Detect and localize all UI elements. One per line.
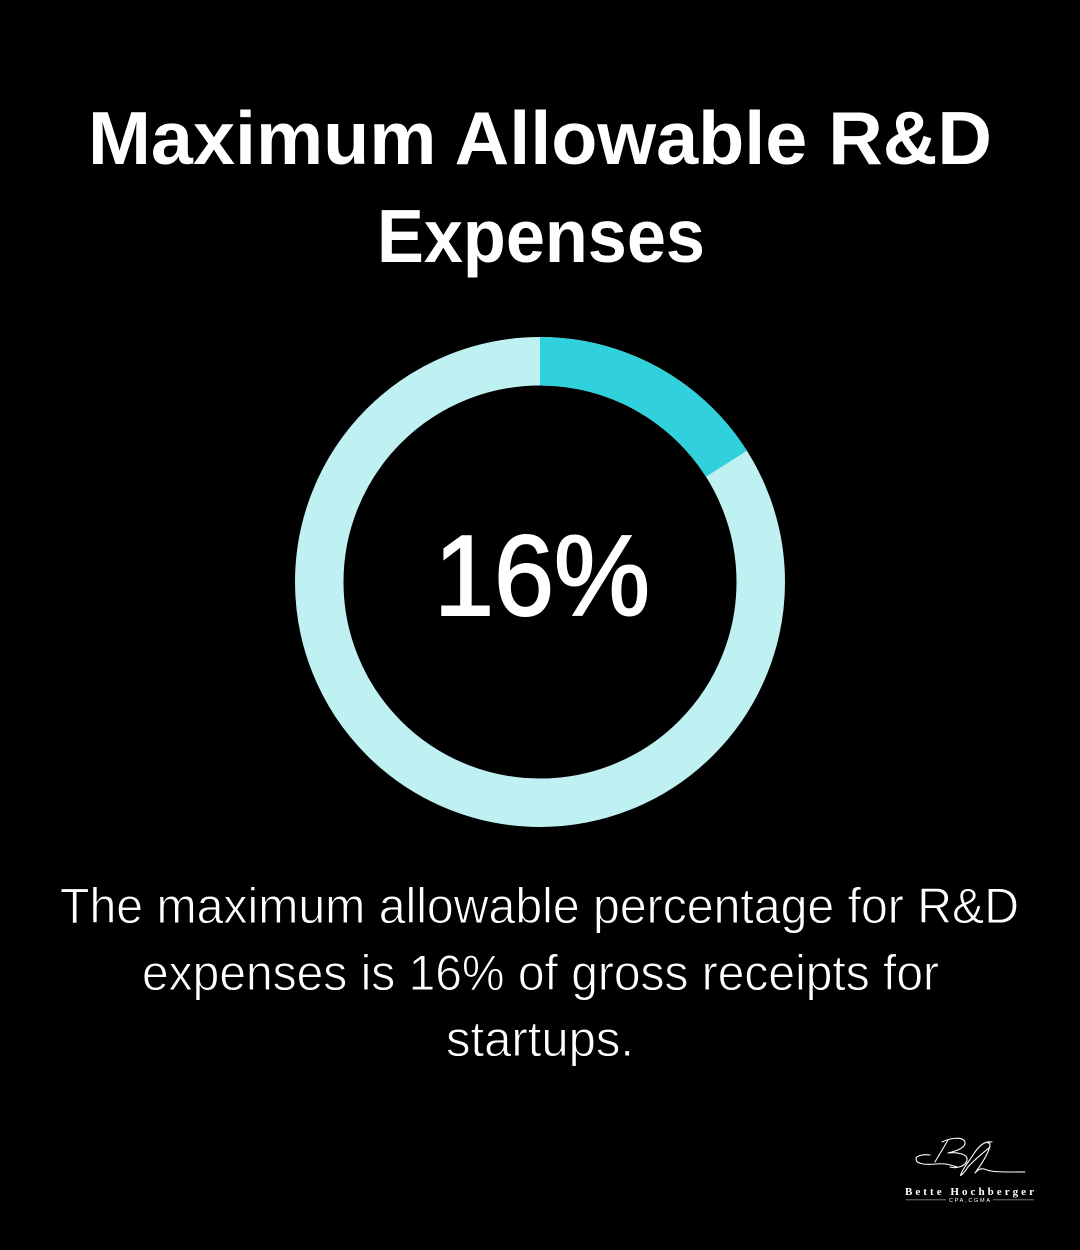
title: Expenses <box>377 194 705 278</box>
chart segment: 16 percent <box>540 337 747 477</box>
title <box>88 96 992 278</box>
donut chart: 16 percent <box>319 337 761 803</box>
description text: startups. <box>446 1011 634 1067</box>
description text: expenses is 16% of gross receipts for <box>142 945 939 1001</box>
logo name: Bette Hochberger <box>905 1186 1034 1198</box>
description text <box>60 878 1019 1067</box>
logo: Bette Hochberger <box>905 1138 1034 1204</box>
chart track: remaining 84 percent <box>319 361 761 803</box>
description text: The maximum allowable percentage for R&D <box>60 878 1019 934</box>
icon: signature flourish <box>916 1138 1025 1175</box>
title: Maximum Allowable R&D <box>88 96 992 180</box>
logo credentials: CPA,CGMA <box>949 1198 990 1204</box>
chart value: 16% <box>434 513 650 640</box>
